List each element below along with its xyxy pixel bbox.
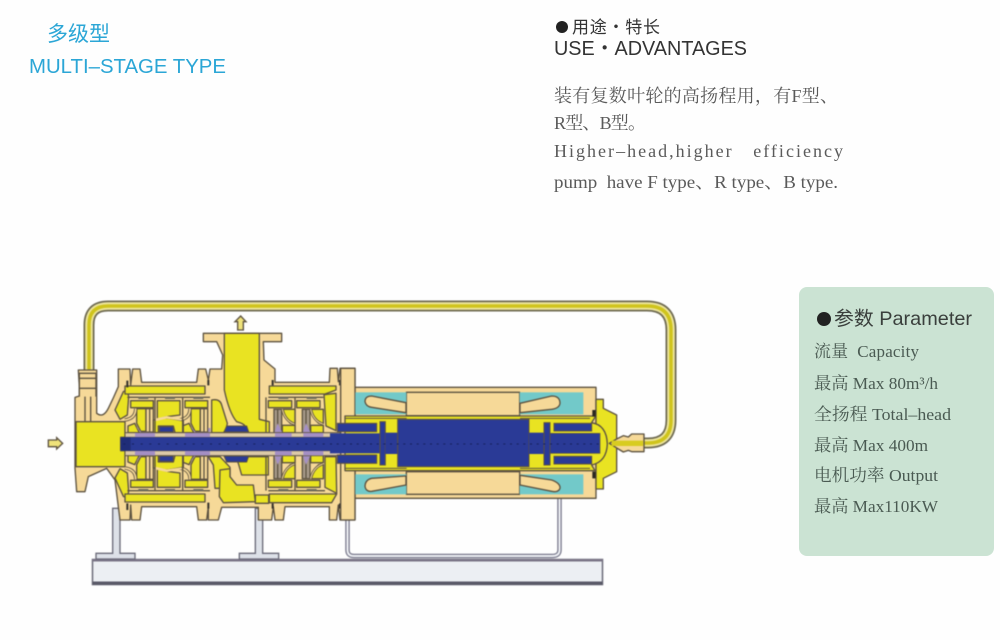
inner yellow chamber — [345, 416, 607, 471]
parameter heading: 参数 Parameter — [834, 308, 973, 330]
description: English line one: Higher–head,higher efficiency — [554, 141, 843, 161]
panel: parameters — [799, 287, 994, 556]
sleeve bottom — [125, 451, 348, 456]
pipe nipple — [609, 434, 644, 452]
seal ring left bottom — [159, 456, 173, 461]
stage frames — [127, 397, 210, 491]
lower volute — [219, 469, 255, 503]
middle diffuser bottom — [153, 455, 183, 491]
heading: English use and advantages: USE・ADVANTAGES — [554, 38, 747, 60]
casing joint seals — [127, 380, 340, 510]
thrust collar front — [380, 422, 385, 465]
bearing sleeve front bottom — [337, 455, 377, 463]
support foot middle — [239, 508, 279, 559]
recirculation pipe — [89, 306, 671, 443]
output label: 电机功率 Output — [814, 466, 938, 485]
stage frames right — [266, 397, 325, 491]
stator core bottom — [406, 472, 520, 494]
text block: use and advantages — [554, 18, 843, 192]
support foot left — [96, 508, 135, 559]
balance ring top — [224, 426, 249, 432]
lower tail block — [255, 495, 269, 503]
motor flange — [341, 368, 355, 520]
suction side internals — [76, 373, 210, 502]
title: English heading: MULTI–STAGE TYPE — [29, 56, 226, 78]
shaft middle front — [385, 433, 398, 454]
shaft middle rear — [529, 433, 544, 454]
title: Chinese heading: 多级型 — [47, 23, 110, 46]
frame ticks right — [278, 398, 317, 490]
impeller stage 1 top — [125, 401, 156, 433]
teal end chamber bottom right — [520, 474, 583, 494]
impeller stage 2 bottom — [179, 455, 210, 487]
stator core top — [406, 392, 520, 416]
bearing sleeve rear top — [554, 423, 592, 431]
pocket left — [212, 400, 227, 433]
icon: bullet — [556, 21, 568, 33]
liner top — [125, 386, 205, 394]
teal end chamber bottom left — [355, 474, 406, 494]
rear cover — [596, 399, 617, 489]
support feet — [96, 508, 279, 559]
arrow: outlet flow — [235, 316, 246, 330]
description: Chinese line two: R型、B型。 — [554, 113, 646, 133]
main shaft — [121, 437, 344, 451]
suction flange pipe detail — [79, 373, 96, 422]
winding top right — [520, 396, 560, 413]
arrow: inlet flow — [48, 438, 63, 449]
pump casing outline — [75, 333, 355, 520]
impeller stage 1 bottom — [125, 455, 156, 487]
winding bottom left — [365, 476, 406, 491]
seal ring left top — [159, 427, 173, 432]
liner bottom — [125, 494, 205, 502]
winding top left — [365, 396, 406, 413]
shaft assembly in pump — [121, 380, 348, 510]
wedge bottom right — [325, 457, 337, 493]
description: English line two: pump have F type、R type、B type. — [554, 172, 838, 192]
motor housing — [355, 387, 596, 498]
impeller stage 3 bottom — [268, 455, 295, 487]
winding bottom right — [520, 475, 560, 492]
wedge top — [115, 390, 129, 419]
teal end chamber top left — [355, 392, 406, 414]
impeller stage 2 top — [179, 401, 210, 433]
description: Chinese line one: 装有复数叶轮的高扬程用，有F型、 — [554, 85, 838, 106]
discharge channel — [224, 333, 269, 433]
shaft end — [121, 437, 131, 451]
suction chamber — [76, 422, 125, 467]
output value: 最高 Max110KW — [814, 497, 939, 516]
lower pocket — [208, 457, 230, 488]
purple sleeve segments — [135, 433, 323, 455]
motor support bracket — [348, 498, 560, 556]
impeller stage 4 bottom — [297, 455, 323, 487]
impeller stage 4 top — [297, 401, 323, 433]
base plate — [92, 559, 602, 585]
bearing sleeve front top — [337, 423, 377, 432]
shaft rear — [550, 433, 600, 453]
panel background — [799, 287, 994, 556]
capacity value: 最高 Max 80m³/h — [814, 374, 938, 393]
heading: Chinese use and advantages: 用途・特长 — [572, 18, 660, 37]
thrust collar rear — [544, 423, 550, 465]
liner bottom right — [269, 494, 337, 503]
rear seal marks — [589, 410, 599, 478]
teal end chamber top right — [520, 392, 583, 414]
shaft centre line — [123, 442, 342, 445]
pump cross-section diagram — [48, 306, 671, 585]
wedge top right — [324, 393, 336, 431]
lower middle chamber — [235, 457, 268, 475]
bearing sleeve rear bottom — [554, 456, 592, 464]
discharge side internals — [208, 333, 337, 503]
rotor can lines — [345, 418, 590, 468]
rotor — [398, 419, 529, 467]
total head label: 全扬程 Total–head — [814, 404, 952, 424]
shaft front — [330, 433, 380, 453]
wedge bottom — [115, 469, 129, 498]
motor section — [330, 368, 644, 520]
middle diffuser top — [153, 397, 183, 433]
icon: parameter bullet — [817, 312, 831, 326]
liner top right — [269, 386, 336, 394]
pipe nipple core — [612, 435, 643, 451]
frame ticks — [138, 398, 203, 490]
total head value: 最高 Max 400m — [814, 436, 928, 455]
balance ring bottom — [224, 456, 249, 462]
capacity label: 流量 Capacity — [814, 342, 920, 361]
impeller stage 3 top — [268, 401, 295, 433]
sleeve top — [125, 433, 348, 437]
rotor centre line — [330, 442, 602, 445]
